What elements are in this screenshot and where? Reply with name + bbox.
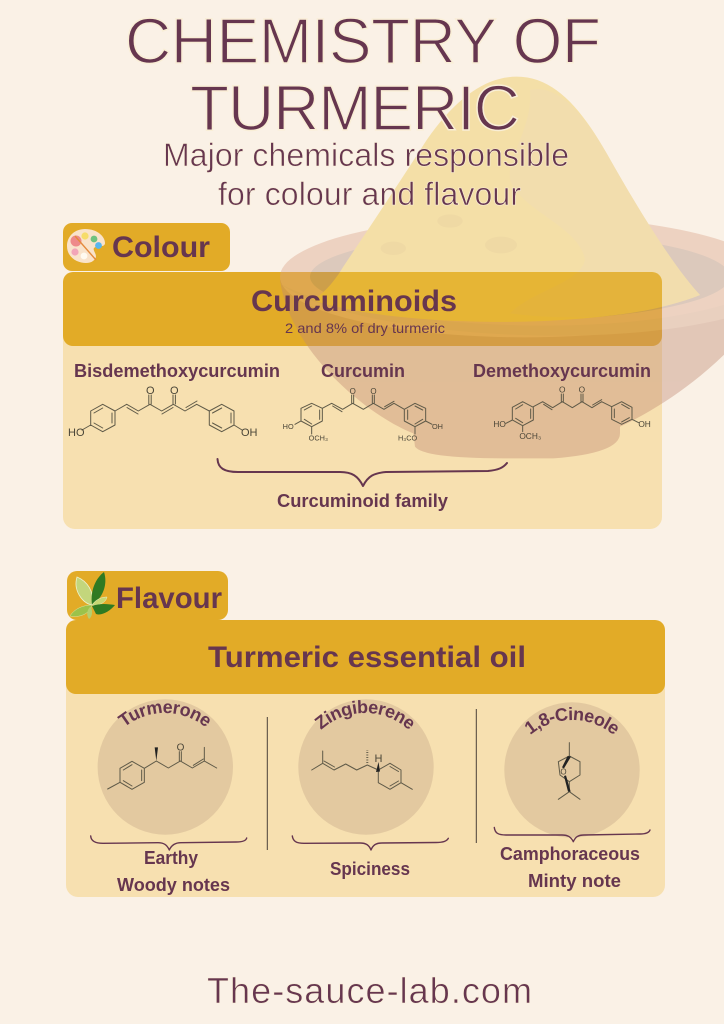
heading: Curcuminoids: 2 and 8% of dry turmeric bbox=[285, 320, 445, 336]
molecule: demethoxycurcumin: OH bbox=[638, 419, 651, 429]
title: TURMERIC bbox=[190, 72, 520, 144]
subtitle: for colour and flavour bbox=[218, 176, 521, 212]
tag: flavour bbox=[67, 571, 228, 620]
molecule: 1,8-cineole: O bbox=[560, 768, 567, 777]
molecule: curcumin: O bbox=[370, 387, 377, 396]
molecule: bisdemethoxycurcumin bbox=[68, 385, 258, 439]
brace: 1,8-Cineole bbox=[494, 828, 650, 842]
circle: Turmerone backdrop bbox=[98, 699, 233, 835]
subtitle: Major chemicals responsible bbox=[163, 137, 569, 173]
molecule: 1,8-cineole bbox=[558, 743, 580, 799]
footer: website: The-sauce-lab.com bbox=[207, 970, 532, 1011]
molecule: demethoxycurcumin: O bbox=[559, 385, 566, 395]
tag label: Colour: Colour bbox=[112, 231, 210, 264]
brace: Turmerone bbox=[91, 836, 247, 850]
curved label: Turmerone: Turmerone bbox=[117, 703, 210, 726]
brace: Zingiberene bbox=[292, 836, 448, 850]
circle: Zingiberene backdrop bbox=[298, 699, 434, 835]
molecule: demethoxycurcumin bbox=[493, 385, 651, 441]
column: Turmerone bbox=[90, 699, 248, 895]
panel: flavour background bbox=[66, 620, 665, 897]
label: Bisdemethoxycurcumin: Bisdemethoxycurcumin bbox=[74, 360, 280, 381]
heading: Turmeric essential oil: Turmeric essential oil bbox=[208, 641, 526, 674]
molecule: bisdemethoxycurcumin: HO bbox=[68, 427, 85, 439]
note: Earthy, Woody notes: Earthy bbox=[144, 847, 199, 868]
illustration: bowl of turmeric powder bbox=[280, 77, 724, 458]
molecule: curcumin bbox=[283, 387, 443, 443]
molecule: bisdemethoxycurcumin: O bbox=[170, 385, 179, 397]
subtitle bbox=[163, 137, 569, 212]
molecule: demethoxycurcumin: O bbox=[579, 385, 586, 395]
column: Zingiberene bbox=[292, 699, 449, 879]
molecule: curcumin: OCH₃ bbox=[309, 434, 328, 443]
tag: colour bbox=[63, 223, 230, 271]
circle: 1,8-Cineole backdrop bbox=[504, 702, 640, 838]
molecule: turmerone: O bbox=[177, 743, 185, 754]
label: Demethoxycurcumin: Demethoxycurcumin bbox=[473, 360, 651, 381]
icon: painter's palette bbox=[67, 229, 105, 263]
heading: Curcuminoids bbox=[251, 285, 457, 336]
note: Camphoraceous, Minty note: Minty note bbox=[528, 870, 621, 891]
column: 1,8-Cineole bbox=[494, 702, 651, 891]
curved label: 1,8-Cineole: 1,8-Cineole bbox=[525, 707, 618, 734]
molecule: demethoxycurcumin: HO bbox=[493, 419, 506, 429]
label: Curcuminoid family: Curcuminoid family bbox=[277, 490, 449, 511]
panel: colour background bbox=[63, 272, 662, 529]
heading: Curcuminoids: Curcuminoids bbox=[251, 285, 457, 318]
molecule: zingiberene bbox=[312, 750, 412, 789]
title bbox=[125, 5, 601, 144]
molecule: bisdemethoxycurcumin: OH bbox=[241, 427, 258, 439]
note: Spiciness: Spiciness bbox=[330, 858, 410, 879]
molecule: demethoxycurcumin: OCH₃ bbox=[519, 431, 541, 441]
title: CHEMISTRY OF bbox=[125, 5, 601, 77]
note: Camphoraceous, Minty note bbox=[500, 843, 640, 891]
molecule: curcumin: O bbox=[350, 387, 356, 396]
note: Earthy, Woody notes: Woody notes bbox=[117, 874, 230, 895]
molecule: curcumin: H₃CO bbox=[398, 434, 418, 443]
molecule: turmerone bbox=[108, 743, 217, 789]
molecule: curcumin: OH bbox=[432, 422, 443, 431]
icon: green leaves bbox=[70, 572, 115, 619]
tag label: Flavour: Flavour bbox=[116, 582, 222, 615]
note: Earthy, Woody notes bbox=[117, 847, 230, 895]
note: Camphoraceous, Minty note: Camphoraceous bbox=[500, 843, 640, 864]
label: Curcumin: Curcumin bbox=[321, 360, 405, 381]
molecule: zingiberene: H bbox=[374, 753, 382, 765]
brace: curcuminoid family bbox=[218, 459, 507, 486]
curved label: Zingiberene: Zingiberene bbox=[314, 700, 414, 730]
molecule: curcumin: HO bbox=[283, 422, 294, 431]
molecule: bisdemethoxycurcumin: O bbox=[146, 385, 155, 397]
